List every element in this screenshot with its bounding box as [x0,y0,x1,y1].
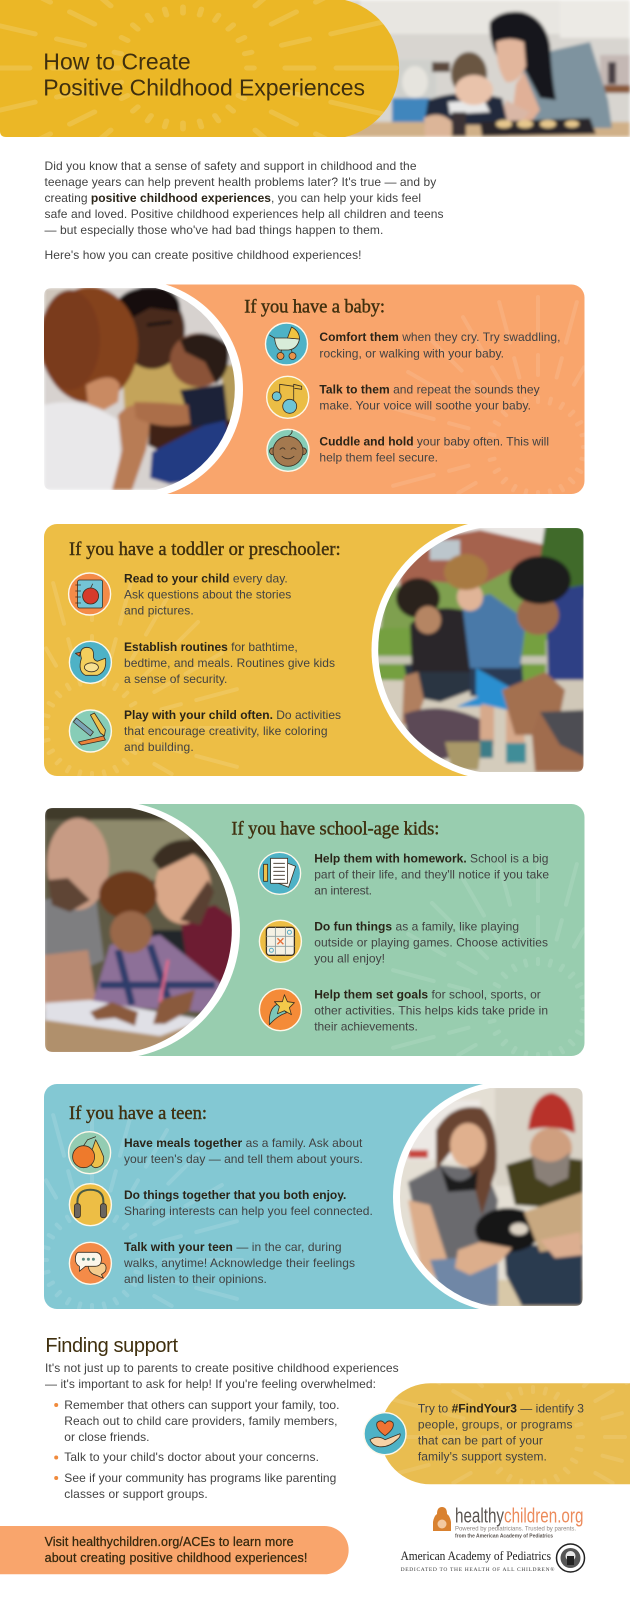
icon: fruit [69,1132,111,1174]
intro text [44,159,444,262]
logo: American Academy of Pediatrics [401,1544,584,1573]
callout: find your 3 [364,1383,630,1484]
logo: American Academy of Pediatrics: American Academy of Pediatrics [401,1548,551,1563]
heading: If you have a toddler or preschooler: [69,540,341,560]
title: How to Create [43,48,191,74]
item text: Establish routines for bathtime, [124,640,298,654]
panel: if you have a toddler or preschooler: bedtime, and meals. Routines give kids [124,656,335,670]
icon: baby face [267,429,309,471]
logo icon [433,1507,451,1531]
item text: Talk with your teen — in the car, during [124,1240,342,1254]
icon: heart in hand [364,1413,406,1455]
panel: if you have school-age kids: part of their life, and they'll notice if you take [314,867,549,881]
item text: Comfort them when they cry. Try swaddling, [319,330,560,344]
call to action bar: about creating positive childhood experiences! [45,1551,307,1565]
heading: Finding support [45,1335,178,1357]
support intro: — it's important to ask for help! If you're feeling overwhelmed: [45,1377,376,1391]
panel: if you have a teen: and listen to their opinions. [124,1272,267,1286]
panel: if you have school-age kids: their achievements. [314,1019,418,1033]
heading: If you have a teen: [69,1104,207,1124]
icon: tic-tac-toe game [259,920,301,962]
panel: if you have a teen: Sharing interests can help you feel connected. [124,1204,373,1218]
callout: find your 3: family's support system. [418,1450,547,1464]
panel: if you have a baby: make. Your voice will soothe your baby. [319,398,531,412]
panel: if you have a baby: help them feel secure. [319,450,438,464]
heading: If you have school-age kids: [231,819,439,839]
panel: if you have a baby [44,284,584,494]
panel: if you have school-age kids: other activities. This helps kids take pride in [314,1003,548,1017]
call to action bar [0,1526,349,1574]
AAP seal [556,1544,584,1572]
item text: Talk to them and repeat the sounds they [319,382,540,396]
photo: family gardening [375,526,587,774]
panel: if you have a toddler or preschooler: and pictures. [124,604,194,618]
photo: two fathers helping daughter with homework [44,806,239,1054]
intro text: — but especially those who've had bad things happen to them. [44,223,383,237]
item text: Help them with homework. School is a big [314,851,548,865]
callout: find your 3: that can be part of your [418,1434,543,1448]
panel: if you have a toddler or preschooler [44,524,584,776]
panel: if you have a teen: walks, anytime! Acknowledge their feelings [123,1256,355,1270]
title: Positive Childhood Experiences [43,75,365,101]
bullet list: Talk to your child's doctor about your concerns. [64,1450,319,1464]
bullet list [54,1398,339,1501]
logo: healthychildren.org: healthychildren.org [455,1506,583,1528]
logo: healthychildren.org: Powered by pediatricians. Trusted by parents. [455,1527,576,1533]
panel: if you have a toddler or preschooler: a sense of security. [124,672,227,686]
item text: Do things together that you both enjoy. [124,1188,346,1202]
callout text: Try to #FindYour3 — identify 3 [418,1402,584,1416]
photo: teen and father with record [396,1086,586,1308]
panel: if you have a toddler or preschooler: Ask questions about the stories [124,588,291,602]
intro text: creating positive childhood experiences, you can help your kids feel [44,191,421,205]
item text: Have meals together as a family. Ask about [124,1136,363,1150]
photo: parents with baby [40,287,244,490]
icon: chat bubbles [69,1242,111,1284]
call to action bar: Visit healthychildren.org/ACEs to learn more [45,1535,294,1549]
icon: shooting star [259,989,301,1031]
icon: headphones [69,1184,111,1226]
logo: American Academy of Pediatrics: DEDICATED TO THE HEALTH OF ALL CHILDREN® [401,1566,554,1573]
support intro [45,1361,399,1391]
panel: if you have a teen: your teen's day — and tell them about yours. [124,1152,363,1166]
intro text: Did you know that a sense of safety and support in childhood and the [44,159,417,173]
panel: if you have a toddler or preschooler: that encourage creativity, like coloring [124,724,328,738]
intro text: safe and loved. Positive childhood experiences help all children and teens [44,207,444,221]
panel: if you have school-age kids: you all enjoy! [314,951,385,965]
bullet list: Reach out to child care providers, family members, [64,1414,338,1428]
logo: healthychildren.org [433,1506,583,1540]
callout: find your 3: people, groups, or programs [418,1418,572,1432]
section: finding support [45,1335,399,1501]
item text: Help them set goals for school, sports, or [314,987,541,1001]
item text: Cuddle and hold your baby often. This will [319,434,549,448]
heading: If you have a baby: [244,297,385,317]
panel: if you have a baby: rocking, or walking with your baby. [319,346,504,360]
bullet list: or close friends. [64,1430,150,1444]
icon: book with apple [69,573,111,615]
support intro: It's not just up to parents to create positive childhood experiences [45,1361,399,1375]
icon: music notes [267,376,309,418]
item text: Do fun things as a family, like playing [314,919,519,933]
icon: stroller [266,323,308,365]
icon: homework papers [259,852,301,894]
panel: if you have school-age kids: outside or playing games. Choose activities [314,935,548,949]
logo: healthychildren.org: from the American Academy of Pediatrics [455,1534,553,1540]
panel: if you have a teen [44,1084,583,1309]
panel: if you have school-age kids: an interest. [314,883,372,897]
bullet list: classes or support groups. [64,1487,208,1501]
panel: if you have a toddler or preschooler: and building. [124,740,194,754]
icon: rubber duck [69,641,111,683]
item text: Read to your child every day. [124,572,288,586]
bullet list: See if your community has programs like parenting [64,1471,336,1485]
intro text: Here's how you can create positive childhood experiences! [44,248,362,262]
panel: if you have school-age kids [45,804,584,1056]
icon: crayons [69,710,111,752]
header banner [0,0,400,137]
item text: Play with your child often. Do activities [124,708,341,722]
photo: mother and son baking [330,0,630,137]
bullet list: Remember that others can support your family, too. [64,1398,340,1412]
intro text: teenage years can help prevent health problems later? It's true — and by [44,175,436,189]
